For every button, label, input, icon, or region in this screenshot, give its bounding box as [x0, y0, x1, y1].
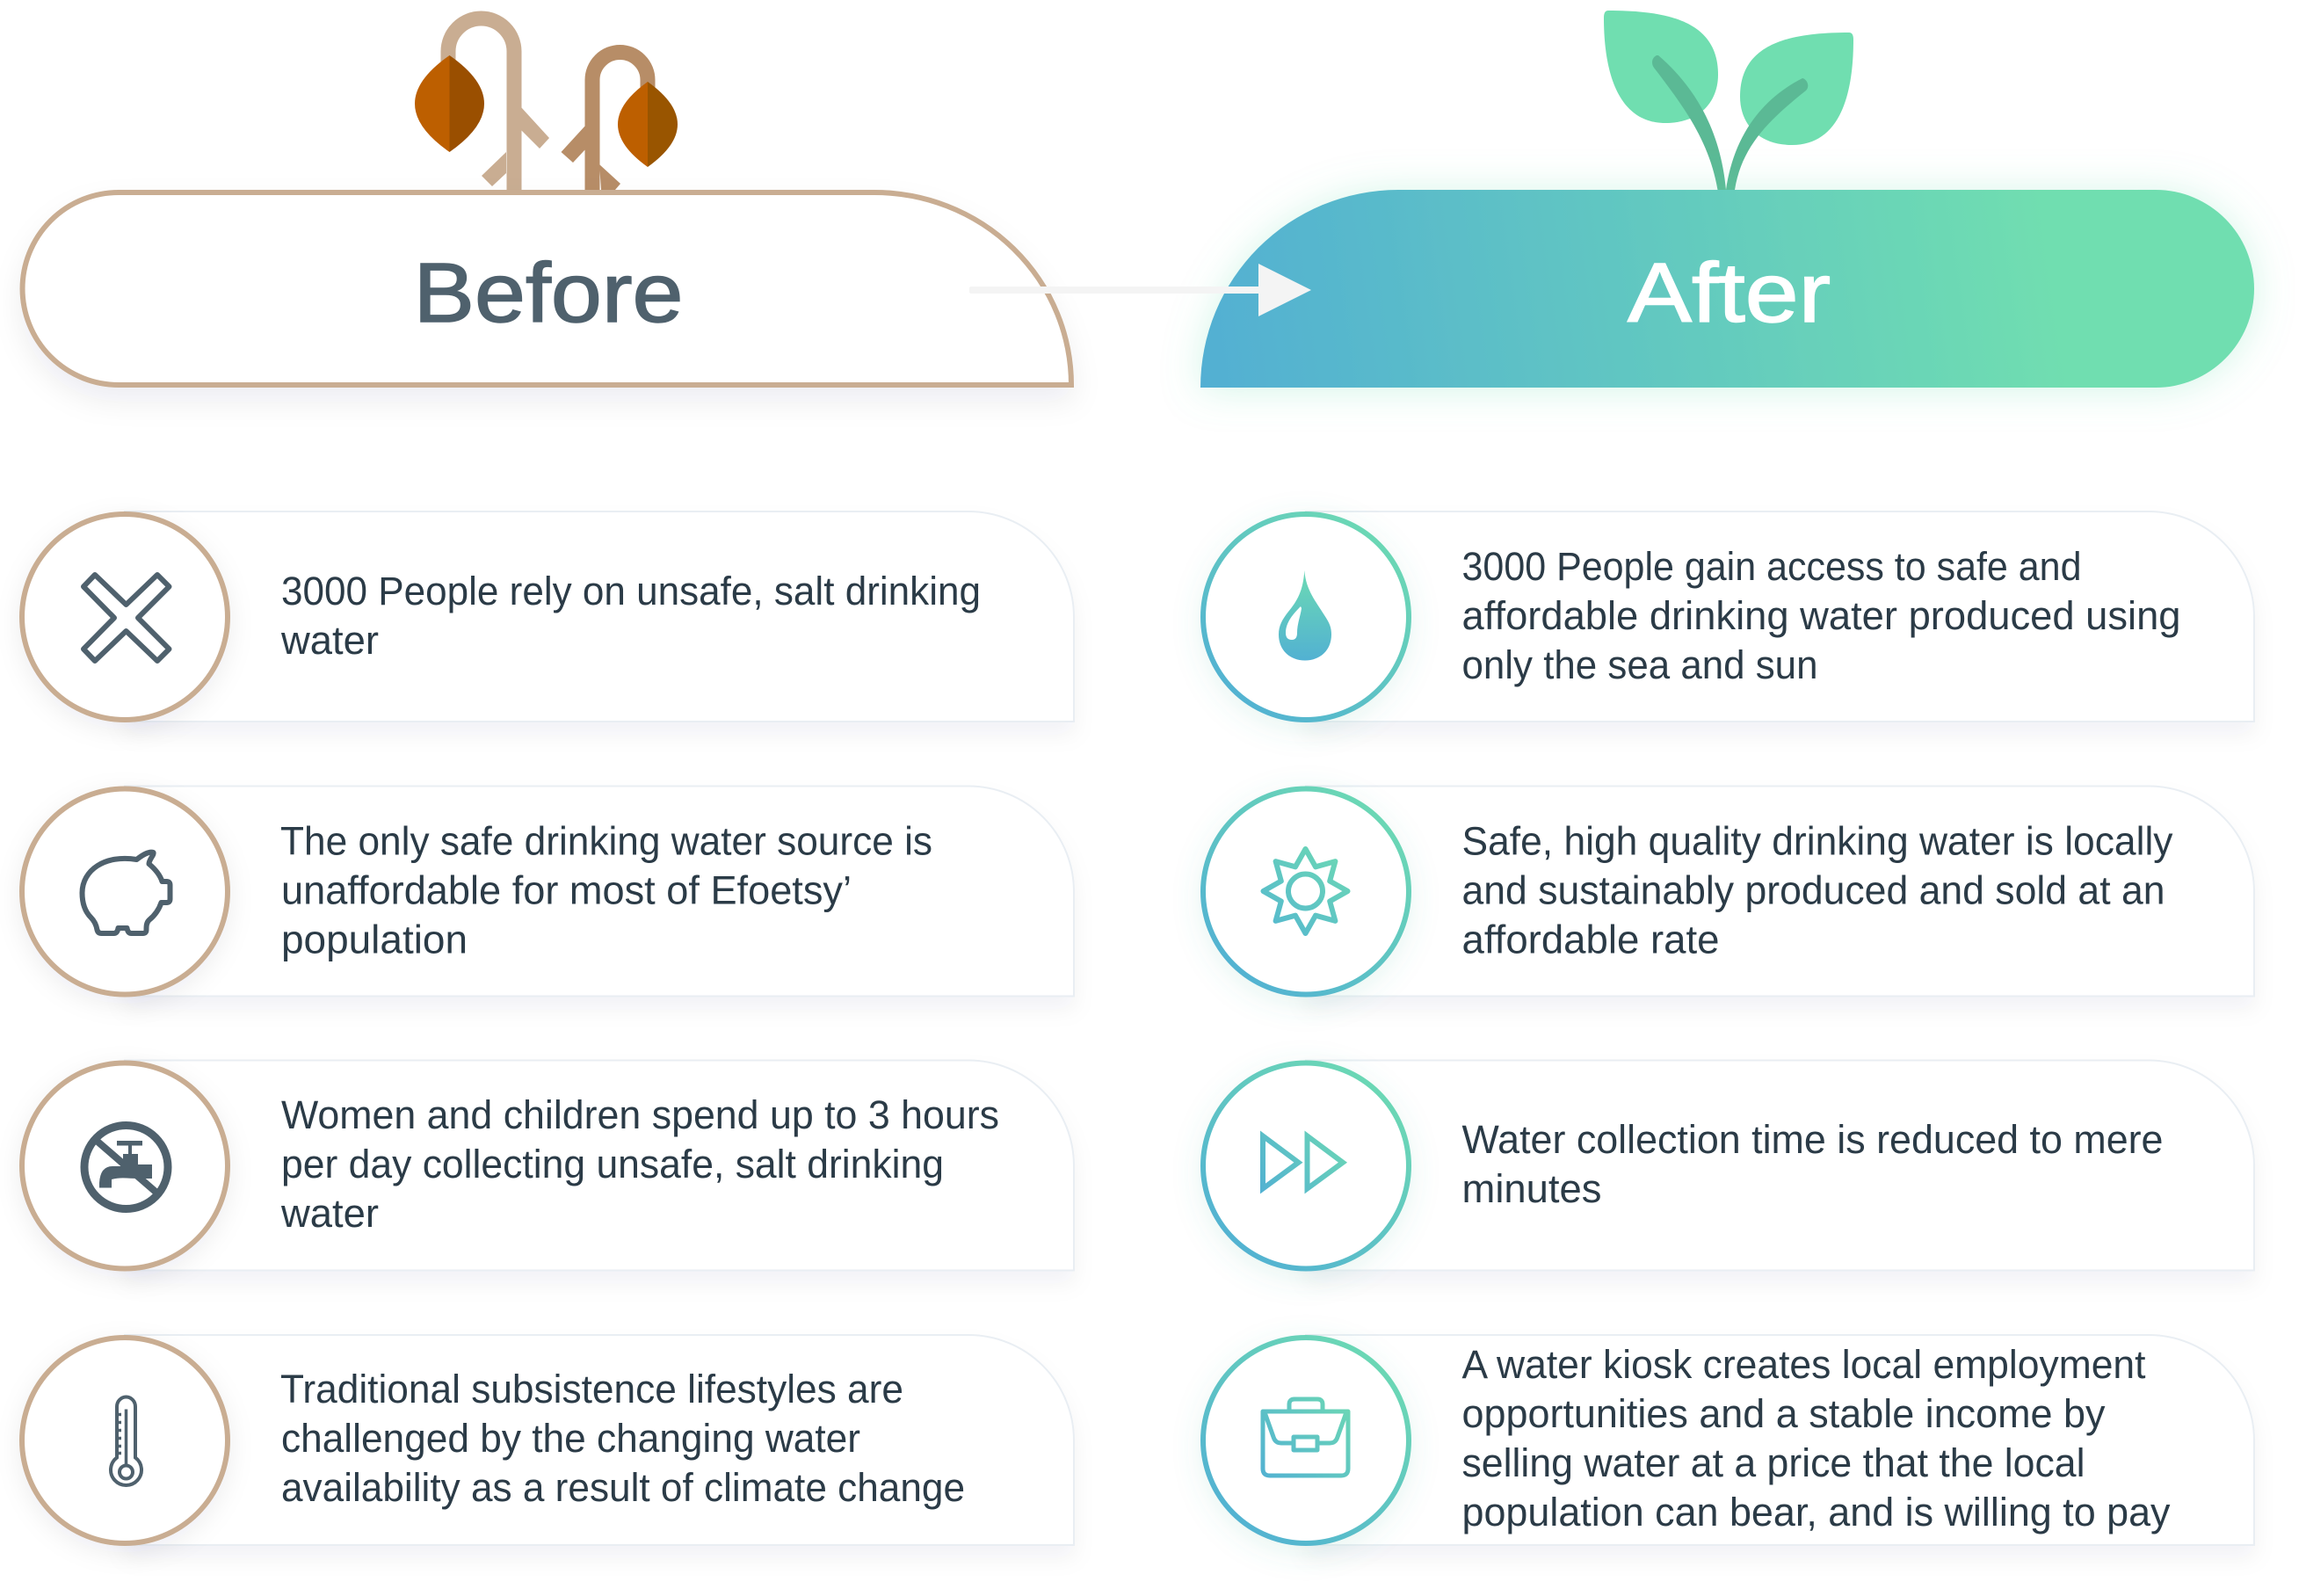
icon badge: thermometer	[22, 1338, 228, 1543]
text block	[280, 819, 932, 961]
card	[1306, 1335, 2254, 1545]
row: unaffordable water	[22, 786, 1074, 997]
text block: 3000 People rely on unsafe, salt drinking	[281, 569, 981, 613]
text block: Traditional subsistence lifestyles are	[280, 1367, 903, 1411]
row: unsafe salt water	[22, 511, 1074, 722]
text block: challenged by the changing water	[281, 1416, 860, 1461]
panel: After list	[1203, 511, 2254, 1545]
text block: opportunities and a stable income by	[1462, 1391, 2106, 1436]
text block: 3000 People gain access to safe and	[1462, 544, 2081, 589]
text block: water	[280, 618, 379, 663]
icon badge: sun	[1203, 789, 1409, 995]
card	[125, 1335, 1074, 1545]
text block	[280, 1367, 965, 1510]
text block: Safe, high quality drinking water is locally	[1462, 819, 2173, 863]
text block: availability as a result of climate change	[281, 1465, 965, 1510]
text block: affordable rate	[1462, 918, 1719, 961]
text block	[1462, 1117, 2164, 1211]
text block: water	[280, 1191, 379, 1236]
card	[125, 511, 1074, 722]
panel: After header	[1200, 11, 2254, 388]
heading: Before: Before	[413, 246, 684, 340]
text block	[280, 569, 981, 663]
icon badge: water drop	[1203, 514, 1409, 720]
text block	[1462, 1342, 2171, 1534]
pill: After	[1200, 190, 2254, 388]
text block: selling water at a price that the local	[1462, 1440, 2085, 1485]
panel: Before list	[22, 511, 1074, 1545]
icon badge: fast forward	[1203, 1063, 1409, 1269]
text block: affordable drinking water produced using	[1462, 593, 2181, 638]
icon badge: cross	[22, 514, 228, 720]
text block: Women and children spend up to 3 hours	[281, 1092, 999, 1137]
icon badge: no tap water	[22, 1063, 228, 1269]
card	[1306, 1060, 2254, 1271]
card	[1306, 786, 2254, 997]
text block: minutes	[1462, 1166, 1601, 1211]
text block: population can bear, and is willing to pay	[1462, 1490, 2171, 1534]
card	[125, 1060, 1074, 1271]
text block: Water collection time is reduced to mere	[1462, 1117, 2164, 1162]
heading: After: After	[1628, 246, 1831, 340]
text block: per day collecting unsafe, salt drinking	[281, 1142, 944, 1186]
row: collection time	[22, 1060, 1074, 1271]
row: reduced collection time	[1203, 1060, 2254, 1271]
text block	[280, 1092, 999, 1236]
text block: and sustainably produced and sold at an	[1462, 868, 2165, 912]
icon badge: piggy bank	[22, 789, 228, 995]
row: local employment	[1203, 1335, 2254, 1545]
pill: Before	[23, 192, 1071, 385]
text block	[1462, 544, 2181, 687]
panel: Before header	[23, 18, 1071, 385]
card	[1306, 511, 2254, 722]
icon: green sprout	[1604, 11, 1853, 190]
card	[125, 786, 1074, 997]
row: climate change	[22, 1335, 1074, 1545]
text block: unaffordable for most of Efoetsy’	[281, 868, 852, 912]
icon: wilted plant	[415, 18, 678, 190]
arrow: before to after	[969, 264, 1311, 316]
text block: population	[281, 918, 468, 961]
row: safe water access	[1203, 511, 2254, 722]
row: affordable local water	[1203, 786, 2254, 997]
text block: only the sea and sun	[1462, 642, 1817, 687]
text block	[1462, 819, 2173, 961]
text block: A water kiosk creates local employment	[1462, 1342, 2146, 1387]
text block: The only safe drinking water source is	[280, 819, 932, 863]
icon badge: briefcase	[1203, 1338, 1409, 1543]
